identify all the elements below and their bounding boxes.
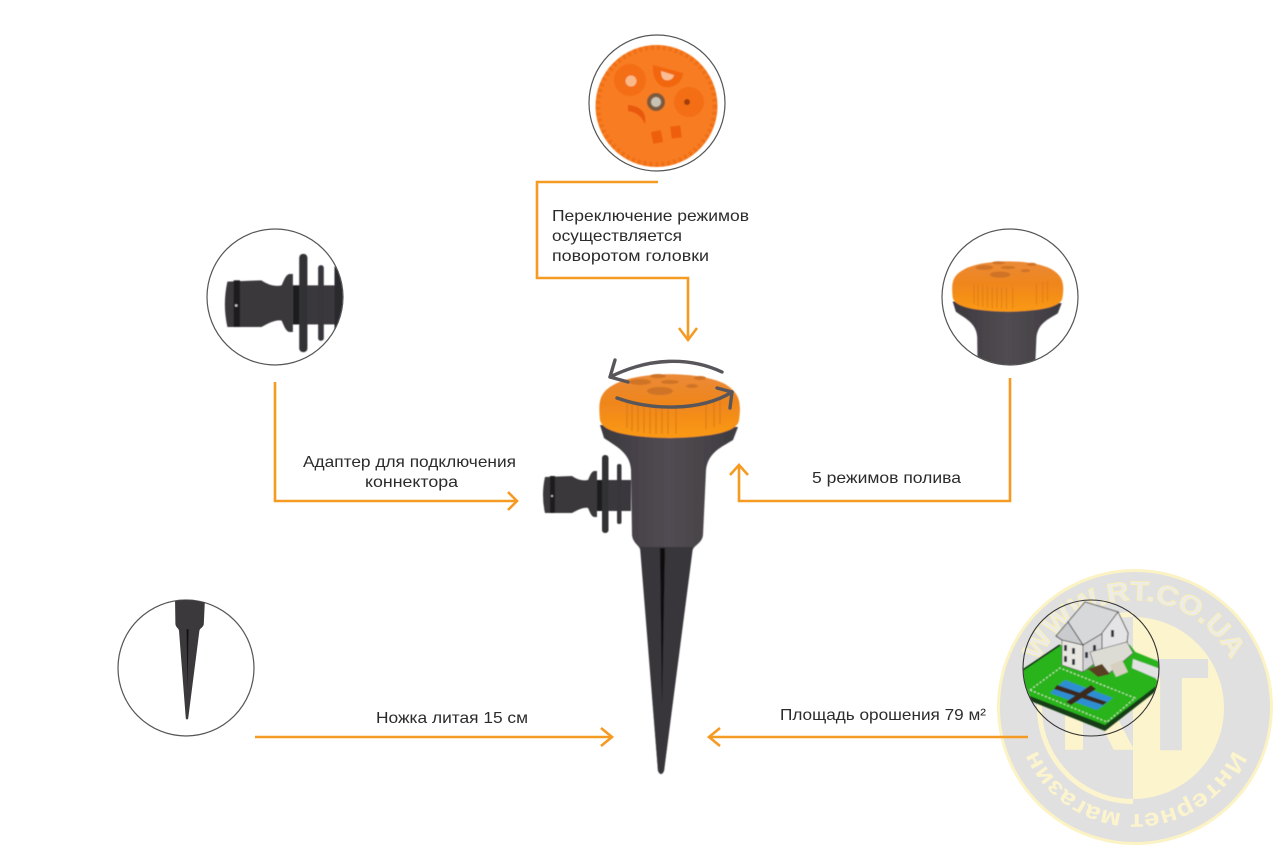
spike shading	[640, 547, 693, 774]
icon: sprinkler product	[543, 374, 740, 774]
icon: adapter closeup	[224, 253, 342, 353]
watermark url: WWW.RT.CO.UA	[1020, 581, 1243, 660]
watermark inner yellow half	[1133, 617, 1224, 799]
arrow: modes line	[730, 378, 1010, 501]
circle outline	[942, 229, 1078, 365]
icon: rotation arrows	[610, 360, 732, 408]
circle outline	[207, 229, 343, 365]
text: adapter label: Адаптер для подключения	[303, 454, 516, 471]
text: adapter label	[303, 454, 516, 491]
head	[599, 374, 740, 438]
watermark caption: Интернет магазин	[1026, 752, 1247, 827]
panel: irrigation area callout	[1018, 600, 1160, 736]
text: mode switching	[552, 208, 749, 265]
spike groove	[660, 548, 665, 705]
arrow: spike line	[255, 728, 612, 746]
icon: house and lawn	[1018, 602, 1160, 731]
text: area label: Площадь орошения 79 м²	[780, 707, 987, 724]
icon: spike closeup	[175, 600, 205, 720]
panel: head side callout	[941, 228, 1079, 366]
watermark letter T: T	[1135, 636, 1207, 775]
text: adapter label: коннектора	[365, 474, 458, 491]
text: spike label: Ножка литая 15 см	[376, 710, 528, 727]
circle outline	[118, 600, 254, 736]
circle outline	[589, 35, 725, 171]
circle outline	[1023, 600, 1159, 736]
text: mode switching: Переключение режимов	[552, 208, 749, 225]
icon: head side closeup	[951, 260, 1064, 364]
panel: adapter callout	[206, 228, 344, 366]
adapter	[543, 455, 631, 533]
panel: spike callout	[117, 599, 255, 737]
arrow: adapter line	[275, 382, 517, 510]
arrow: area line	[709, 728, 1028, 746]
text: mode switching: поворотом головки	[552, 248, 709, 265]
text: mode switching: осуществляется	[552, 228, 682, 245]
icon: head top view	[596, 45, 718, 167]
watermark letter R: R	[1060, 636, 1133, 775]
text: modes label: 5 режимов полива	[812, 470, 961, 487]
panel: watermark	[997, 569, 1273, 845]
panel: head top callout	[589, 35, 725, 171]
body and spike	[600, 425, 738, 774]
arrow: top callout line	[537, 182, 697, 340]
